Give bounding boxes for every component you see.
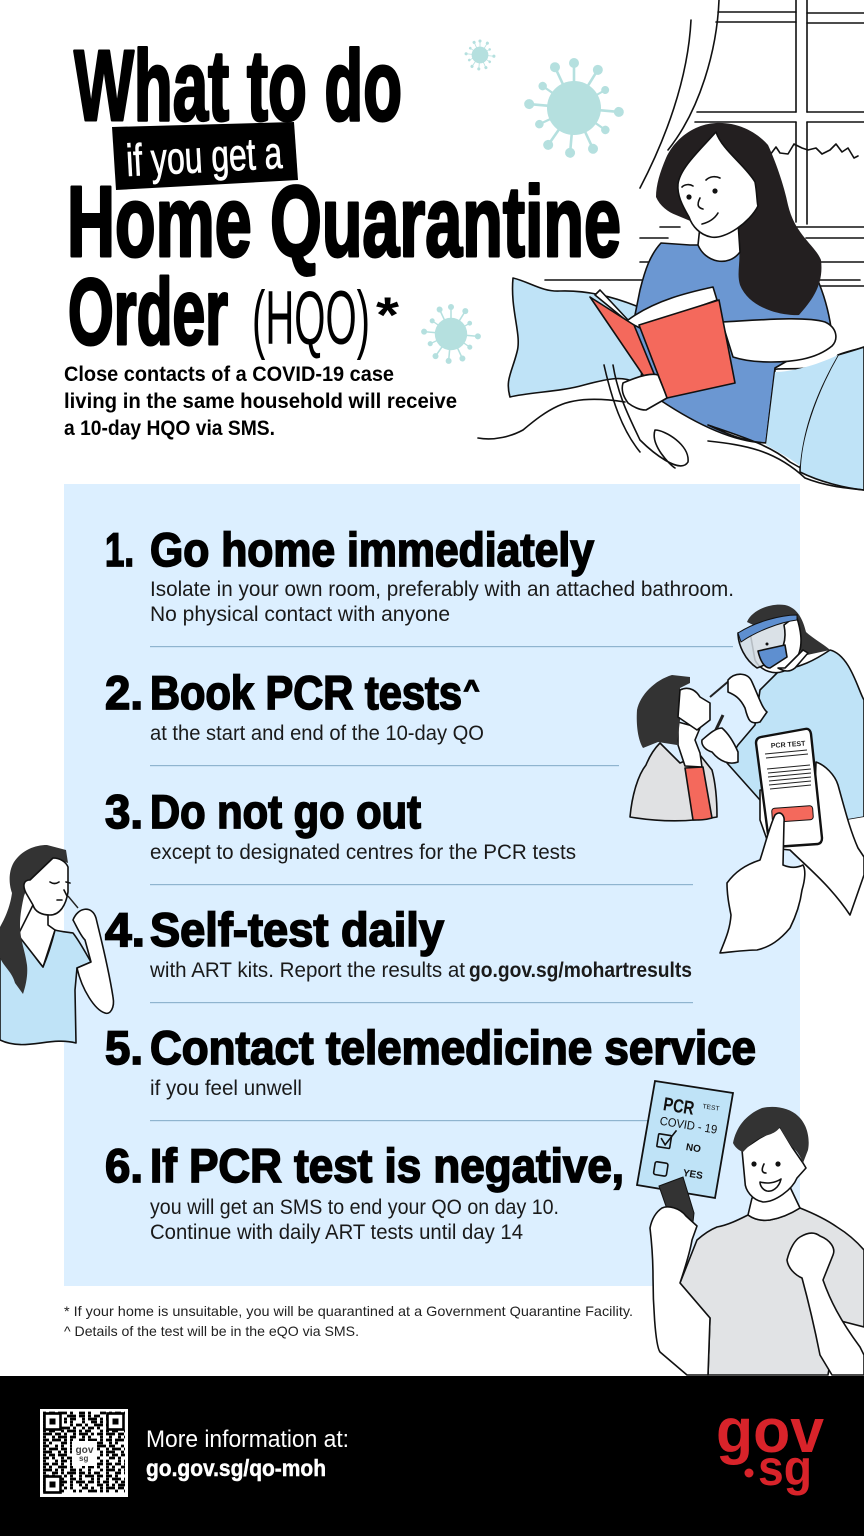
card COVID: COVID - 19: [659, 1114, 719, 1137]
step 3: [105, 785, 576, 864]
phone: [756, 729, 822, 847]
step 4: go.gov.sg/mohartresults: [469, 959, 692, 982]
pages of the book: [595, 287, 717, 328]
facial features: [50, 882, 70, 900]
title line 3: Order: [68, 259, 228, 364]
card YES: YES: [682, 1168, 704, 1182]
nurse gown: [727, 650, 864, 828]
title: [67, 30, 621, 364]
footer text: [146, 1426, 349, 1481]
icon: virus small top: [464, 40, 496, 71]
step 1: Go home immediately: [150, 523, 594, 576]
nurse hair: [747, 605, 830, 655]
hair: [733, 1107, 809, 1163]
step 1: No physical contact with anyone: [150, 603, 450, 626]
intro text: a 10-day HQO via SMS.: [64, 416, 275, 440]
face: [678, 132, 758, 237]
gloved hands: [728, 674, 767, 723]
step 2: at the start and end of the 10-day QO: [150, 722, 484, 745]
title line 3: *: [376, 287, 400, 343]
step 1: 1.: [105, 523, 134, 576]
step 5: Contact telemedicine service: [150, 1021, 756, 1074]
panel: steps background: [64, 484, 800, 1286]
patient hair: [637, 675, 690, 748]
footnotes: * If your home is unsuitable, you will be quarantined at a Government Quarantine Facility.: [64, 1303, 633, 1319]
torso: [632, 240, 832, 443]
footnotes: ^ Details of the test will be in the eQO via SMS.: [64, 1323, 359, 1339]
footer text: go.gov.sg/qo-moh: [146, 1455, 326, 1481]
nurse face: [750, 618, 801, 673]
hand on book: [622, 374, 667, 410]
illustration: man with negative result: [637, 1081, 864, 1375]
illustration: woman reading in bed: [478, 123, 864, 490]
bed sheet line: [478, 399, 625, 439]
eyes and grin: [751, 1161, 781, 1191]
step 2: [105, 666, 484, 745]
step 4: [105, 903, 692, 982]
patient face and mask: [678, 688, 710, 730]
tick box: [652, 1128, 677, 1177]
step 6: 6.: [105, 1139, 143, 1192]
phone label: PCR TEST: [771, 741, 806, 750]
card TEST: TEST: [702, 1103, 720, 1113]
face: [24, 858, 68, 915]
eye marks: [766, 642, 768, 646]
title line 3: (HQO): [252, 276, 370, 361]
step 3: except to designated centres for the PCR tests: [150, 841, 576, 864]
eyes and smile: [682, 177, 720, 224]
intro text: [64, 362, 457, 440]
step 2: 2.: [105, 666, 143, 719]
face shield: [738, 615, 797, 668]
title ribbon: [112, 122, 298, 190]
hair: [0, 845, 68, 994]
step 1: Isolate in your own room, preferably with an attached bathroom.: [150, 578, 734, 601]
intro text: Close contacts of a COVID-19 case: [64, 362, 394, 386]
pillow: [508, 278, 650, 397]
shirt: [0, 930, 91, 1045]
hand behind phone: [760, 762, 864, 915]
shirt: [680, 1208, 864, 1375]
step 6: you will get an SMS to end your QO on day 10.: [150, 1196, 559, 1219]
card PCR: PCR: [662, 1094, 696, 1120]
pointing hand: [720, 813, 805, 953]
icon: virus medium: [421, 304, 481, 364]
held phone: [659, 1177, 694, 1222]
footnotes: [64, 1303, 633, 1339]
neck: [748, 1187, 800, 1220]
hair: [656, 123, 821, 315]
step 1: [105, 523, 734, 626]
patient cardigan: [630, 743, 717, 821]
left arm: [650, 1207, 710, 1375]
swab stick: [68, 896, 78, 908]
step 3: 3.: [105, 785, 143, 838]
step 3: Do not go out: [150, 785, 421, 838]
title ribbon: if you get a: [125, 127, 284, 186]
illustration: swab test and phone: [630, 605, 864, 953]
blanket: [708, 347, 864, 490]
patient shirt: [685, 767, 712, 820]
swab: [710, 680, 730, 697]
phone lines: [765, 750, 811, 789]
QR code: gov: [76, 1445, 94, 1456]
step 2: Book PCR tests: [150, 666, 462, 719]
gov.sg logo: gov: [716, 1397, 824, 1466]
white lower right area: [800, 817, 864, 940]
step 6: If PCR test is negative,: [150, 1139, 624, 1192]
step 4: Self-test daily: [150, 903, 444, 956]
illustration: woman self-testing: [0, 845, 113, 1045]
gov.sg logo: [716, 1397, 824, 1496]
QR code: [40, 1409, 128, 1497]
step 4: with ART kits. Report the results at: [149, 959, 465, 982]
footer text: More information at:: [146, 1426, 349, 1453]
arm and hand: [73, 909, 113, 1013]
right arm and fist: [787, 1233, 864, 1375]
phone button: [772, 806, 813, 822]
step 6: [105, 1139, 624, 1244]
icon: virus large: [524, 58, 624, 158]
gov.sg logo: sg: [758, 1440, 812, 1496]
nurse collar: [778, 650, 808, 671]
result card: [637, 1081, 733, 1198]
step 5: [105, 1021, 756, 1100]
neck: [18, 905, 55, 967]
neck: [698, 222, 740, 261]
QR code: sg: [79, 1454, 88, 1463]
arm: [722, 319, 836, 362]
step 2: ^: [464, 676, 479, 703]
book cover: [590, 297, 664, 398]
nurse mask: [758, 645, 787, 668]
step 6: Continue with daily ART tests until day 14: [150, 1221, 523, 1244]
face: [742, 1127, 806, 1202]
step 5: 5.: [105, 1021, 143, 1074]
footer band: [0, 1376, 864, 1536]
intro text: living in the same household will receive: [64, 389, 457, 413]
title line 1: What to do: [74, 30, 402, 142]
card NO: NO: [685, 1142, 702, 1155]
illustration: window and curtain: [545, 0, 864, 286]
patient neck: [678, 722, 702, 767]
step 5: if you feel unwell: [150, 1077, 302, 1100]
step 4: 4.: [105, 903, 145, 956]
